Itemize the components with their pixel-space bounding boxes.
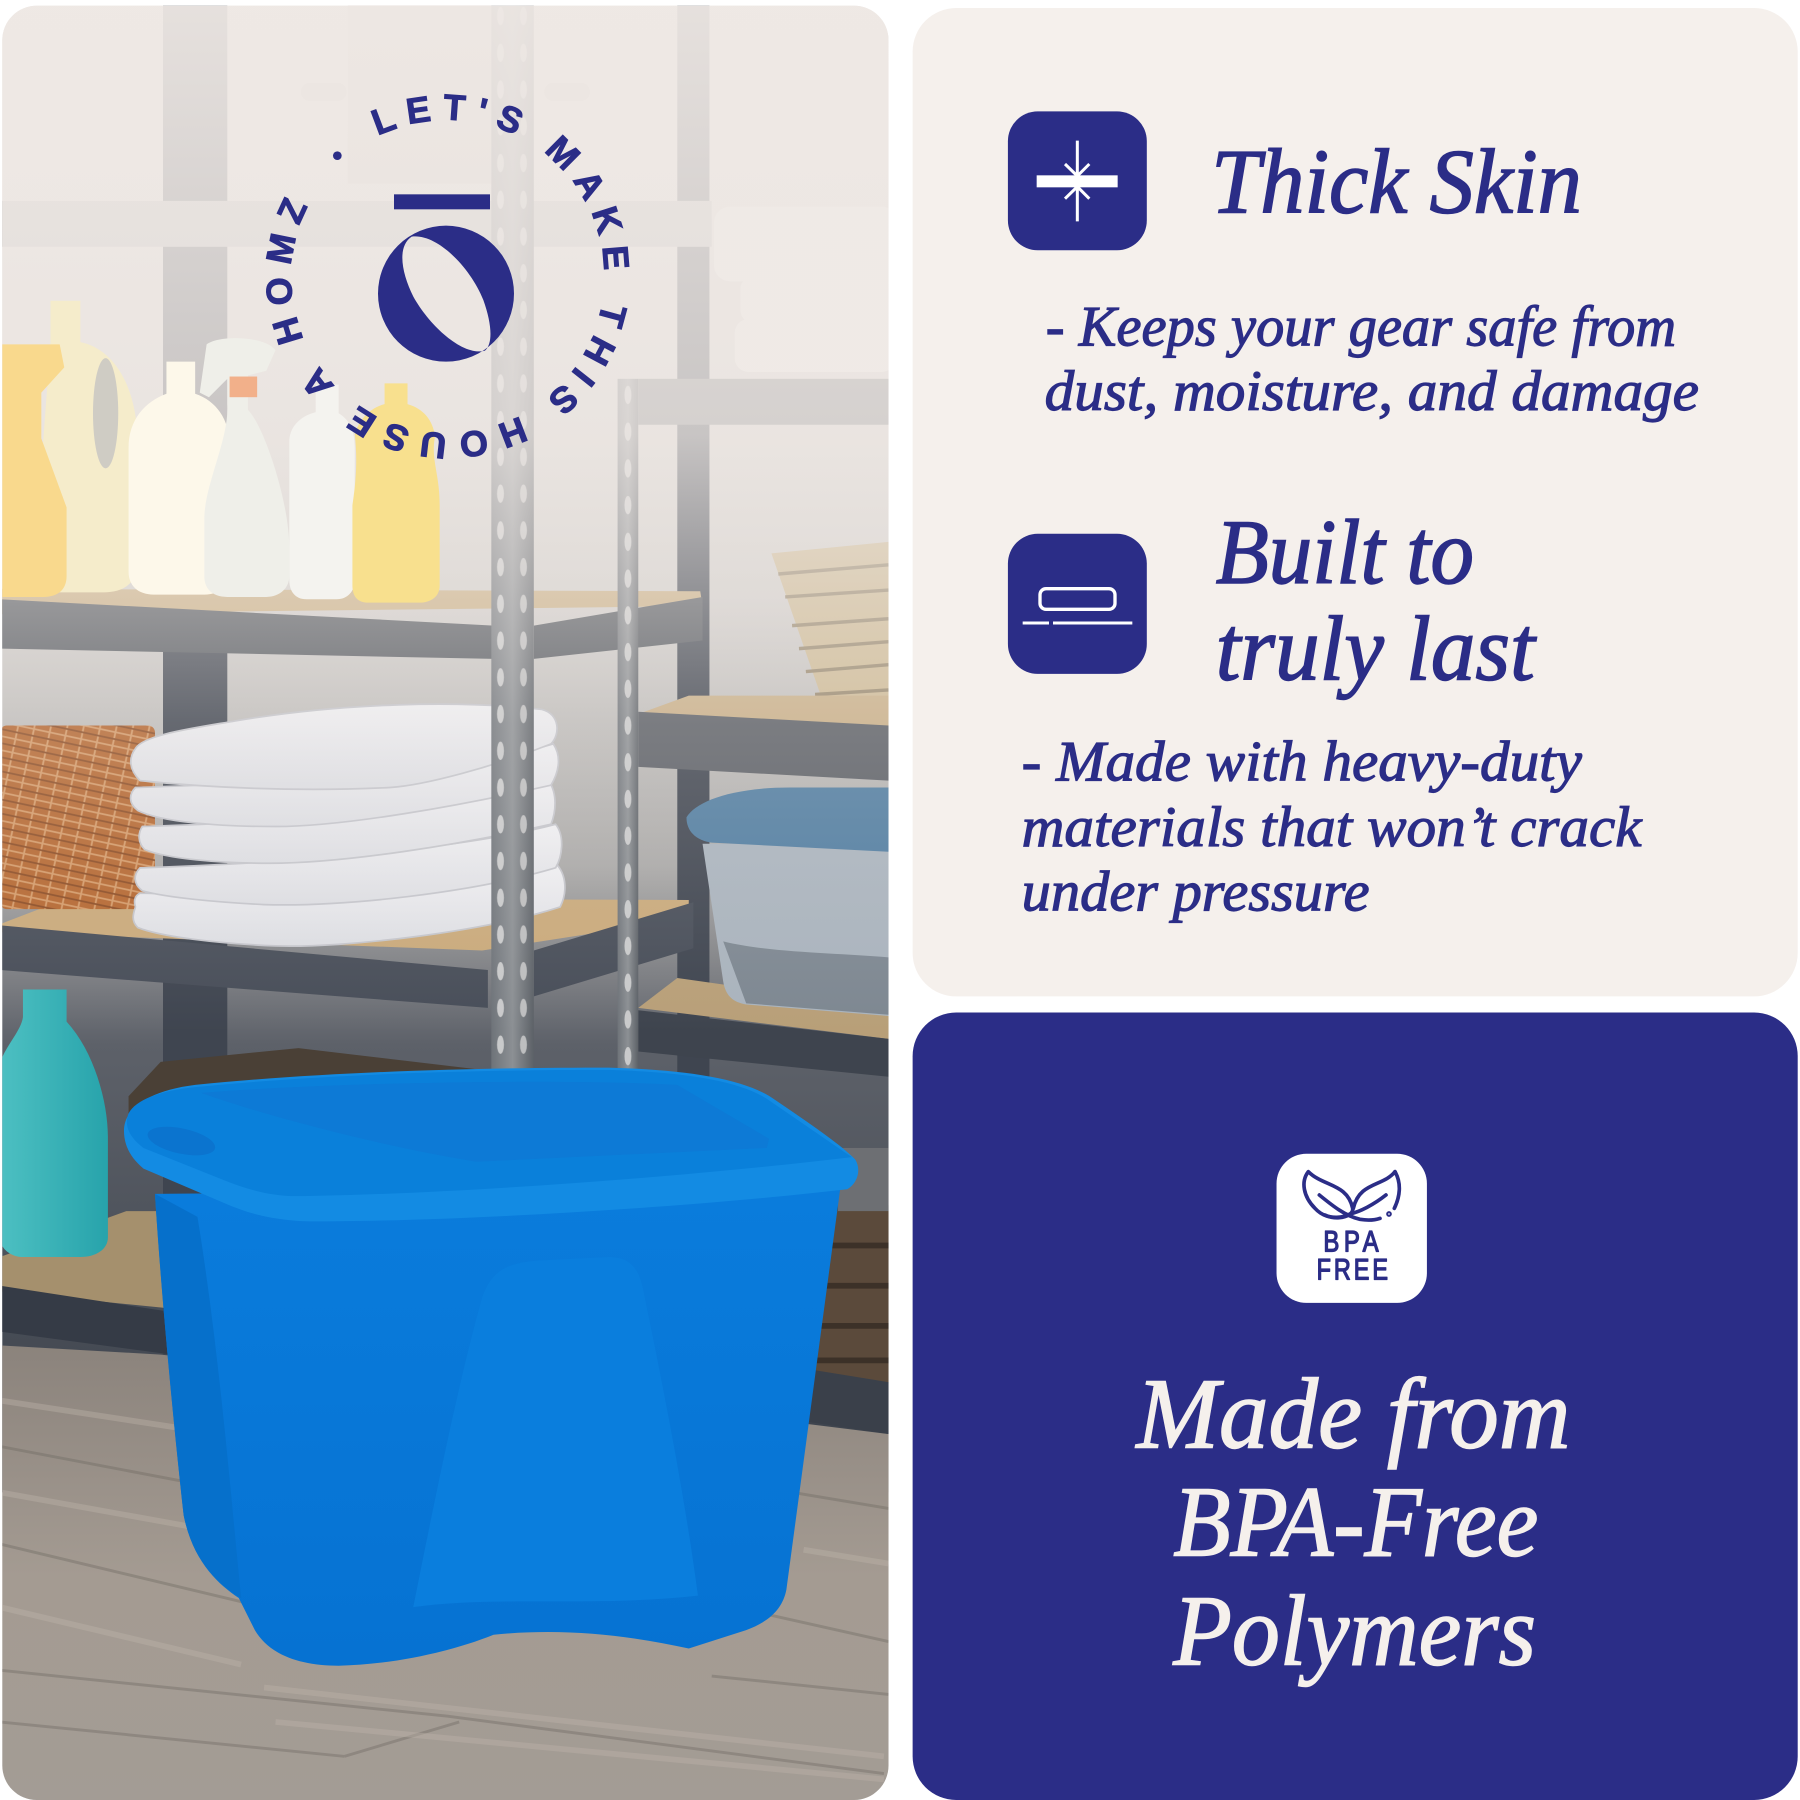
icon: lasting lid: [1008, 534, 1147, 674]
teal bottle: [0, 990, 108, 1257]
circular slogan text: LET'S MAKE THIS HOUSE A HOMZ: [266, 94, 630, 460]
icon: BPA free badge: BPA: [1323, 1224, 1383, 1258]
misty photo fade: [0, 0, 895, 1033]
icon: BPA free badge: FREE: [1317, 1253, 1391, 1286]
text: built to last description: - Made with heavy-duty: [1022, 731, 1582, 794]
back wall: [0, 0, 895, 1492]
icon: BPA free badge: [1277, 1154, 1427, 1303]
right steel upright: [618, 379, 638, 1073]
panel background: [913, 1012, 1798, 1800]
back shelf uprights: [163, 0, 709, 1355]
right shelving unit: [638, 379, 889, 1077]
bottles on top shelf: [0, 301, 440, 603]
stacked towels: [131, 704, 565, 946]
text: built to last description: materials that won’t crack: [1022, 796, 1643, 859]
heading: made from BPA-free polymers: BPA-Free: [1173, 1465, 1538, 1577]
main steel upright: [491, 0, 534, 1073]
woven basket left: [0, 726, 155, 909]
wicker basket behind bin right: [804, 1148, 895, 1435]
logo ring: [378, 226, 514, 362]
text: built to last description: under pressure: [1022, 860, 1370, 923]
lid inner panel: [201, 1082, 769, 1162]
floor planks: [0, 1345, 895, 1800]
bin side shadow: [155, 1194, 241, 1598]
bin lid: [127, 1070, 852, 1196]
top steel beam: [0, 201, 712, 247]
heading: built to truly last: truly last: [1216, 598, 1537, 700]
logo: circular badge: [266, 94, 630, 460]
wicker basket top right: [772, 542, 888, 696]
panel: product photo: [0, 0, 901, 1800]
logo bar: [394, 194, 490, 209]
lid handle: [145, 1122, 218, 1161]
logo dot: [333, 151, 342, 160]
dark basket behind bin: [129, 1048, 482, 1114]
heading: thick skin: Thick Skin: [1211, 130, 1582, 232]
panel: features: [913, 8, 1798, 996]
lid lip: [124, 1068, 858, 1221]
heading: made from BPA-free polymers: Made from: [1135, 1358, 1570, 1470]
icon: compression cross: [1008, 111, 1147, 250]
text: thick skin description: - Keeps your gear safe from: [1046, 296, 1676, 359]
panel: BPA free: [913, 1012, 1798, 1800]
upper folded linens: [714, 207, 901, 372]
text: thick skin description: [1045, 296, 1699, 423]
bin body: [155, 1188, 840, 1666]
bin front recess: [413, 1257, 698, 1607]
small lidded bin on shelf: [686, 788, 889, 1016]
heading: made from BPA-free polymers: [1135, 1358, 1570, 1687]
heading: made from BPA-free polymers: Polymers: [1172, 1575, 1536, 1687]
top shelf: [0, 589, 703, 659]
text: built to last description: [1022, 731, 1643, 923]
heading: built to truly last: Built to: [1216, 501, 1474, 603]
text: thick skin description: dust, moisture, and damage: [1045, 360, 1699, 423]
second shelf: [0, 898, 693, 1008]
blue storage bin: [124, 1068, 858, 1666]
bottom shelf: [0, 1211, 172, 1355]
heading: built to truly last: [1216, 501, 1537, 700]
panel background: [913, 8, 1798, 996]
faint cooking pot on top shelf: [348, 6, 491, 7]
